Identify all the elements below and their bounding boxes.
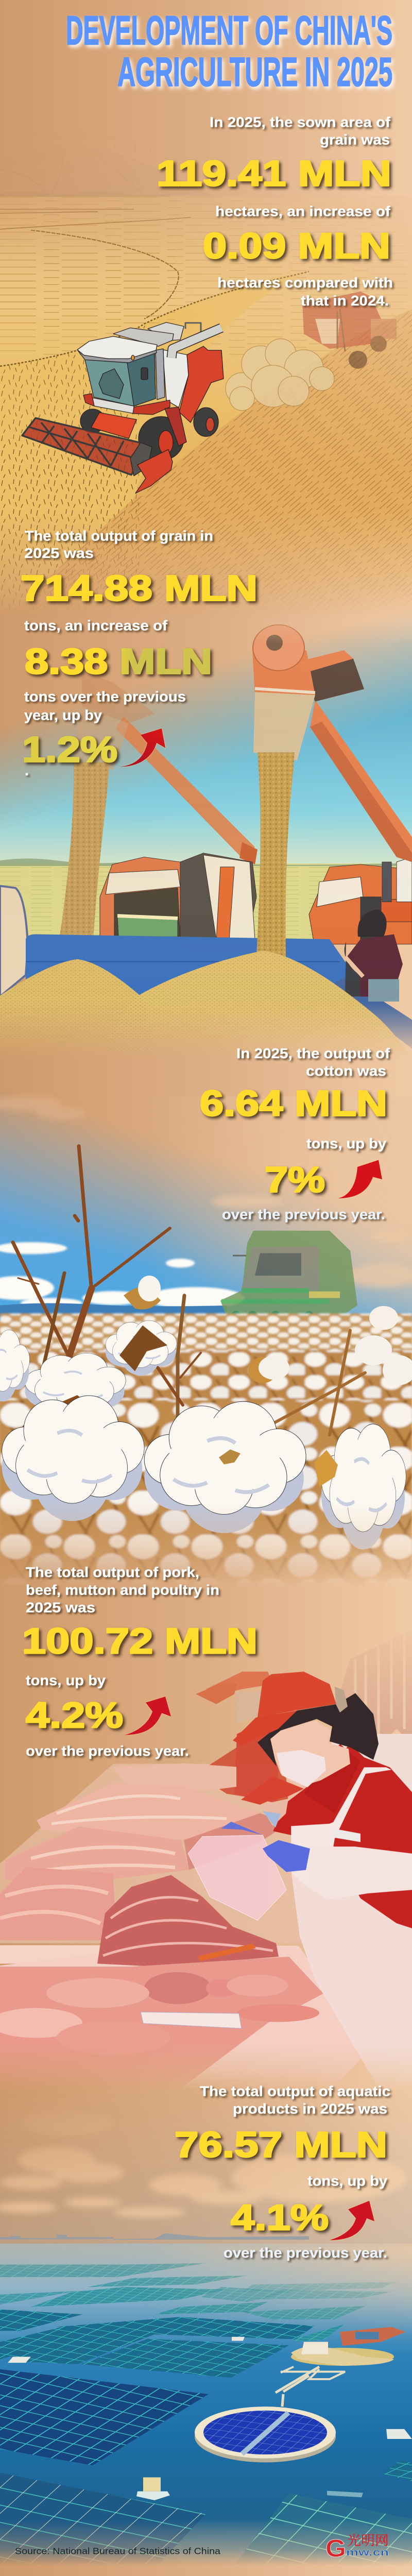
comparison text: hectares compared with xyxy=(217,275,393,291)
price card xyxy=(141,2012,242,2028)
background conveyor meat xyxy=(184,1813,288,1870)
blue gloves xyxy=(263,1840,310,1872)
number: 76.57 MLN: 76.57 MLN xyxy=(175,2125,387,2165)
left harvester xyxy=(100,853,256,940)
upper deck xyxy=(148,323,184,341)
closing text: over the previous year. xyxy=(222,1207,385,1223)
arrow: up xyxy=(119,728,165,767)
mirror xyxy=(141,368,148,380)
green cotton picker xyxy=(220,1231,357,1320)
text block: sown area of grain xyxy=(157,114,393,309)
bottom left farm xyxy=(0,2473,206,2576)
near fish farm xyxy=(0,2369,209,2465)
standing wheat xyxy=(0,272,308,584)
plastic bag xyxy=(188,1835,286,1920)
combine harvester xyxy=(22,323,224,493)
unit text: tons, up by xyxy=(26,1672,106,1689)
sea xyxy=(0,2244,412,2576)
previous year text: tons over the previous xyxy=(24,689,186,705)
logo: gmw.cn xyxy=(325,2533,389,2562)
meat intro line 3: 2025 was xyxy=(26,1600,95,1616)
header xyxy=(22,418,150,475)
intro text: In 2025, the sown area of xyxy=(210,114,391,130)
aquatic intro text: The total output of aquatic xyxy=(200,2083,390,2100)
neck and face xyxy=(266,1720,350,1787)
cab roof xyxy=(77,336,157,359)
wheels xyxy=(80,409,105,433)
logo letter G: G xyxy=(325,2534,346,2562)
background workers xyxy=(196,1672,288,1804)
cotton field rows xyxy=(0,1146,412,1589)
unit text: hectares, an increase of xyxy=(215,204,391,220)
text block: aquatic products output xyxy=(175,2083,390,2261)
grain piles xyxy=(0,951,409,1059)
rice field xyxy=(0,858,412,943)
ladder xyxy=(165,407,186,446)
floor and wall xyxy=(0,1764,412,1943)
cab glass xyxy=(85,351,156,406)
number: 6.64 MLN: 6.64 MLN xyxy=(200,1083,387,1124)
scene: cotton field xyxy=(0,1071,412,1589)
sky xyxy=(0,588,412,867)
stray full stop: . xyxy=(25,762,29,779)
small boats xyxy=(8,2337,412,2500)
hanging meat in background xyxy=(330,1629,412,1744)
big cotton bolls xyxy=(0,1330,406,1550)
sleeve xyxy=(307,1846,412,1900)
text block: cotton output xyxy=(200,1046,390,1223)
red cap xyxy=(258,1672,336,1718)
hair xyxy=(258,1693,379,1766)
meat intro line 2: beef, mutton and poultry in xyxy=(26,1582,219,1599)
right auger xyxy=(252,625,412,862)
front table xyxy=(0,1945,102,1963)
bottom right farm xyxy=(226,2493,412,2576)
source note: Source: National Bureau of Statistics of China xyxy=(15,2546,220,2556)
number: 100.72 MLN: 100.72 MLN xyxy=(22,1621,258,1662)
upper bolls xyxy=(25,1276,412,1419)
truck cab xyxy=(0,886,28,996)
previous year line 2: year, up by xyxy=(24,707,102,723)
circular fish pen xyxy=(195,2406,336,2462)
cotton sky xyxy=(0,1071,412,1320)
logo domain: mw.cn xyxy=(346,2547,389,2558)
grain intro text: The total output of grain in xyxy=(25,528,213,544)
number: 4.1%: 4.1% xyxy=(231,2198,329,2238)
number: 1.2%: 1.2% xyxy=(22,730,117,770)
dark meat pile xyxy=(97,1875,279,1967)
number: 7%: 7% xyxy=(265,1160,325,1200)
back meat rows xyxy=(113,1764,236,1794)
text block: meat output xyxy=(22,1564,258,1759)
arrow: up xyxy=(338,1160,382,1198)
aquatic intro line 2: products in 2025 was xyxy=(233,2101,387,2117)
number: 714.88 MLN: 714.88 MLN xyxy=(21,568,258,608)
floating platform xyxy=(291,2327,406,2366)
left auger xyxy=(74,670,258,865)
front meat tray xyxy=(0,1957,323,2093)
right harvester xyxy=(309,857,412,944)
number: 0.09 MLN: 0.09 MLN xyxy=(203,226,390,266)
man in shirt xyxy=(345,909,403,1002)
distant hills with wind turbines xyxy=(0,178,170,197)
jacket xyxy=(273,1744,412,1928)
right edge farm xyxy=(384,2461,412,2481)
unloading pipe xyxy=(171,328,221,358)
scene: meat processing line xyxy=(0,1629,412,2093)
grain intro line 2: 2025 was xyxy=(24,546,94,562)
red body xyxy=(179,346,224,422)
scene: grain pouring into truck xyxy=(0,588,412,1059)
scene: wheat field with combine harvester xyxy=(0,178,412,611)
arrow: up xyxy=(125,1697,171,1735)
pen xyxy=(198,1944,256,1961)
collar xyxy=(304,1744,360,1814)
cotton intro line 2: cotton was xyxy=(306,1063,386,1079)
right grain stream xyxy=(256,752,295,957)
sky with clouds xyxy=(0,2088,412,2247)
blue truck bed xyxy=(26,934,412,1056)
front small worker xyxy=(241,1776,304,1805)
logo Chinese name: 光明网 xyxy=(347,2533,389,2548)
main branch xyxy=(13,1146,365,1470)
dust cloud xyxy=(226,339,334,411)
closing text: over the previous year. xyxy=(26,1743,189,1759)
city skyline xyxy=(0,2233,309,2240)
meat intro text: The total output of pork, xyxy=(26,1564,199,1581)
wheat field ground xyxy=(0,197,412,498)
walkway xyxy=(276,2367,345,2406)
number: 119.41 MLN: 119.41 MLN xyxy=(157,154,391,194)
stubble rows and harvested strip xyxy=(154,309,412,484)
right lower apron xyxy=(291,1873,412,2093)
unit text: tons, up by xyxy=(307,2173,387,2190)
unit text: tons, up by xyxy=(306,1136,386,1152)
cab base xyxy=(92,398,134,414)
rail and exhaust xyxy=(185,323,201,333)
haze on right xyxy=(144,2244,412,2338)
far fish farm strips xyxy=(0,2263,397,2331)
apron bib and strap xyxy=(291,1767,391,1888)
right side haze over sky xyxy=(144,1096,412,1320)
closing text: over the previous year. xyxy=(224,2245,387,2261)
title xyxy=(66,8,392,95)
far harvester xyxy=(302,292,397,369)
hair tie xyxy=(335,1687,348,1713)
scene: coastal aquaculture xyxy=(0,2088,412,2576)
white panels xyxy=(163,350,188,408)
mid fish farm panels xyxy=(0,2317,344,2378)
cotton intro text: In 2025, the output of xyxy=(236,1046,390,1062)
peach haze on the right xyxy=(174,197,412,447)
arrow: up xyxy=(330,2201,374,2240)
clouds xyxy=(0,1096,88,1120)
text block: total grain output xyxy=(21,528,258,779)
foreground wheat ticks xyxy=(0,438,139,618)
intro text line 2: grain was xyxy=(320,132,390,148)
increase text: tons, an increase of xyxy=(24,618,168,634)
left grain stream xyxy=(55,762,109,964)
comparison text line 2: that in 2024. xyxy=(301,293,389,309)
number: 8.38 MLN: 8.38 MLN xyxy=(25,642,212,682)
number: 4.2%: 4.2% xyxy=(26,1696,123,1736)
face mask xyxy=(277,1750,326,1787)
